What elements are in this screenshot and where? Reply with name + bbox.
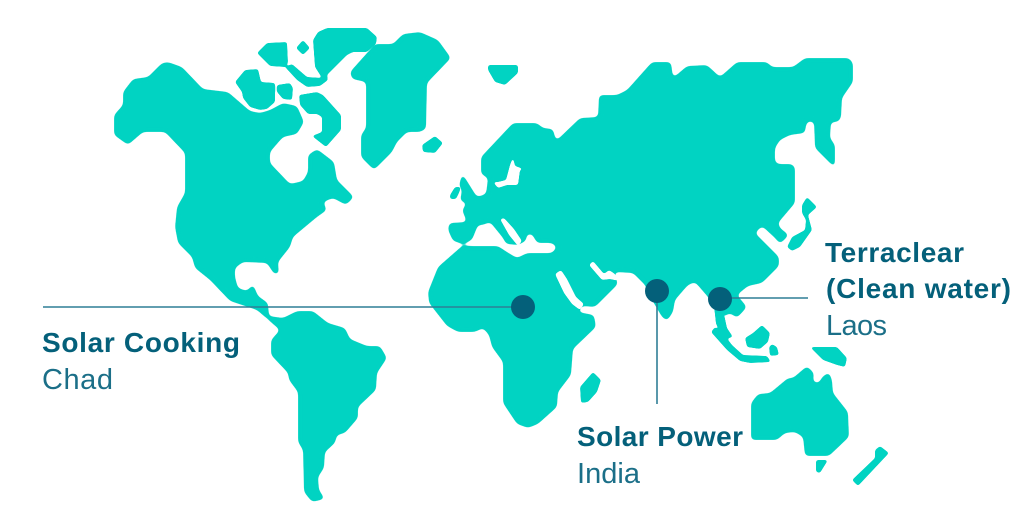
landmass: Americas <box>114 62 387 502</box>
island: arctic small diamond <box>296 40 310 55</box>
island: Madagascar <box>580 372 601 403</box>
island: Tasmania <box>816 460 828 473</box>
island: Iceland <box>422 136 443 153</box>
label: Solar Cooking, Chad: Solar Cooking <box>42 327 240 358</box>
island: New Zealand <box>852 446 889 486</box>
landmass: Eurasia and Africa <box>428 58 853 428</box>
peninsula: Malaysia <box>714 306 733 339</box>
inland seas <box>493 157 619 310</box>
label: Terraclear (Clean water), Laos: Laos <box>826 310 887 342</box>
sea: Baltic <box>493 157 524 188</box>
island: Svalbard <box>488 65 518 85</box>
label: Terraclear (Clean water), Laos <box>825 237 1011 342</box>
island: New Guinea <box>810 347 847 367</box>
island: Borneo <box>745 325 770 349</box>
label: Terraclear (Clean water), Laos: (Clean water) <box>826 273 1011 304</box>
island: Sumatra and Java <box>711 327 771 363</box>
island: Victoria <box>235 69 275 110</box>
island: Japan <box>787 197 817 251</box>
island: arctic centre <box>277 83 293 100</box>
island: Ireland <box>450 187 461 199</box>
landmass: Greenland <box>350 32 451 170</box>
sea: Red Sea <box>555 270 584 310</box>
sea: Persian Gulf <box>589 261 619 281</box>
label: Solar Power, India: Solar Power <box>577 421 743 452</box>
marker: India with leader line <box>645 279 669 404</box>
continents <box>114 32 853 502</box>
island: Sulawesi <box>769 344 779 356</box>
label: Solar Cooking, Chad <box>42 327 240 396</box>
landmass: Australia <box>751 366 849 456</box>
label: Solar Power, India <box>577 421 743 490</box>
marker: Chad with leader line <box>43 295 535 319</box>
label: Solar Power, India: India <box>577 458 641 490</box>
marker: Laos with leader line <box>708 287 808 311</box>
island: Baffin <box>299 92 341 147</box>
sea: Adriatic <box>500 218 522 246</box>
island: Ellesmere <box>285 28 377 87</box>
label: Solar Cooking, Chad: Chad <box>42 364 113 396</box>
islands and peninsulas <box>235 28 889 486</box>
island: arctic west <box>257 42 288 67</box>
label: Terraclear (Clean water), Laos: Terraclear <box>825 237 964 268</box>
